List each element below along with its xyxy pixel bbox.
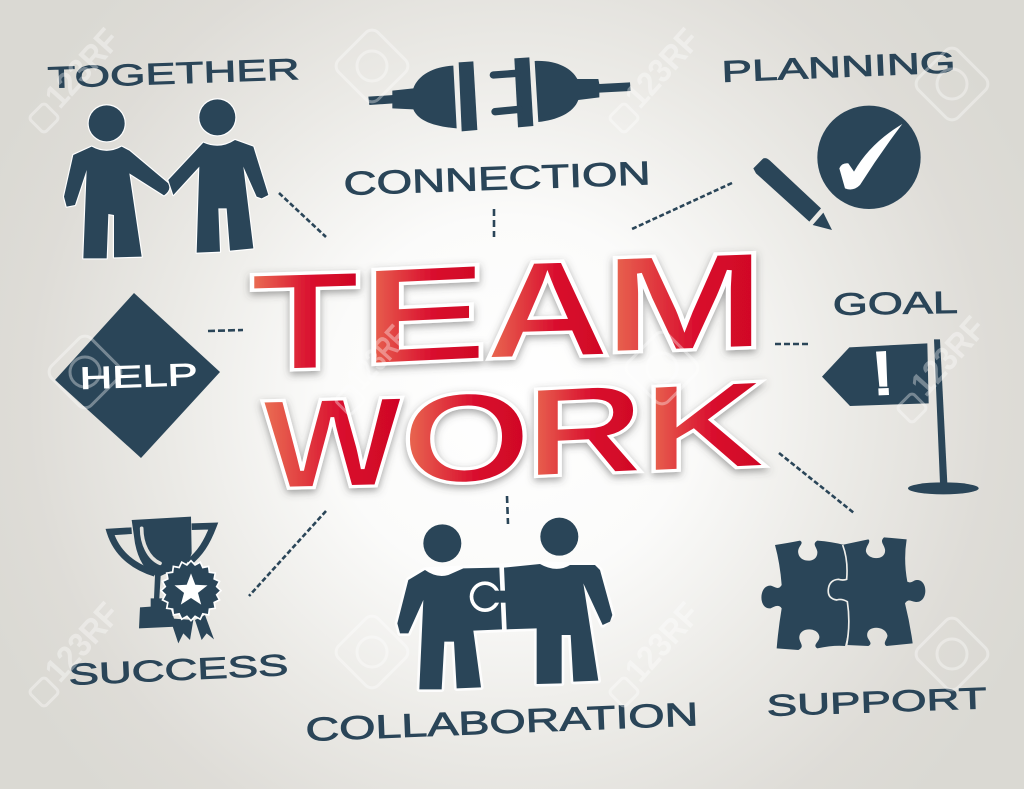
title: TEAM WORK [250, 223, 768, 517]
label: SUCCESS: SUCCESS [68, 649, 289, 692]
title line: TEAM: A [484, 229, 611, 389]
watermarks: 123RF [618, 596, 708, 689]
title line: TEAM: E [361, 235, 488, 395]
icon: trophy with rosette [110, 517, 221, 643]
connector: help [208, 330, 243, 331]
title line: TEAM [250, 223, 767, 401]
watermarks: 123RF [38, 22, 128, 115]
connector: goal [775, 343, 811, 345]
icon: two people shaking hands [64, 99, 268, 258]
label: TOGETHER: TOGETHER [47, 53, 300, 95]
watermarks: 123RF [904, 310, 994, 403]
label: GOAL: GOAL [833, 285, 958, 322]
watermarks: 123RF [38, 596, 128, 689]
connector: success [249, 511, 326, 596]
connector: together [279, 193, 326, 237]
icon: goal flag [822, 339, 979, 494]
icon: help diamond with label [55, 293, 220, 458]
connector: collaboration [507, 496, 508, 524]
connector: connection [493, 209, 495, 237]
label: SUPPORT: SUPPORT [766, 682, 987, 723]
title line: TEAM: M [602, 223, 767, 383]
title line: WORK: O [401, 364, 532, 511]
icon: check mark and pencil [753, 106, 921, 230]
title line: WORK: W [262, 370, 403, 517]
label: HELP: HELP [79, 357, 198, 396]
label: CONNECTION: CONNECTION [343, 154, 651, 202]
watermarks: 123RF [340, 318, 416, 397]
title line: WORK: K [642, 355, 768, 499]
title line: WORK [262, 355, 768, 517]
label: PLANNING: PLANNING [721, 46, 956, 89]
watermarks: 123RF [618, 22, 708, 115]
icon: plug and socket [368, 57, 631, 131]
title line: WORK: R [525, 358, 644, 505]
label: COLLABORATION: COLLABORATION [305, 695, 699, 748]
icon: two people joined by puzzle [397, 518, 612, 689]
connector: support [779, 453, 854, 513]
connector: planning [632, 183, 732, 229]
icon: puzzle pieces [761, 537, 925, 650]
title line: TEAM: T [250, 242, 360, 401]
